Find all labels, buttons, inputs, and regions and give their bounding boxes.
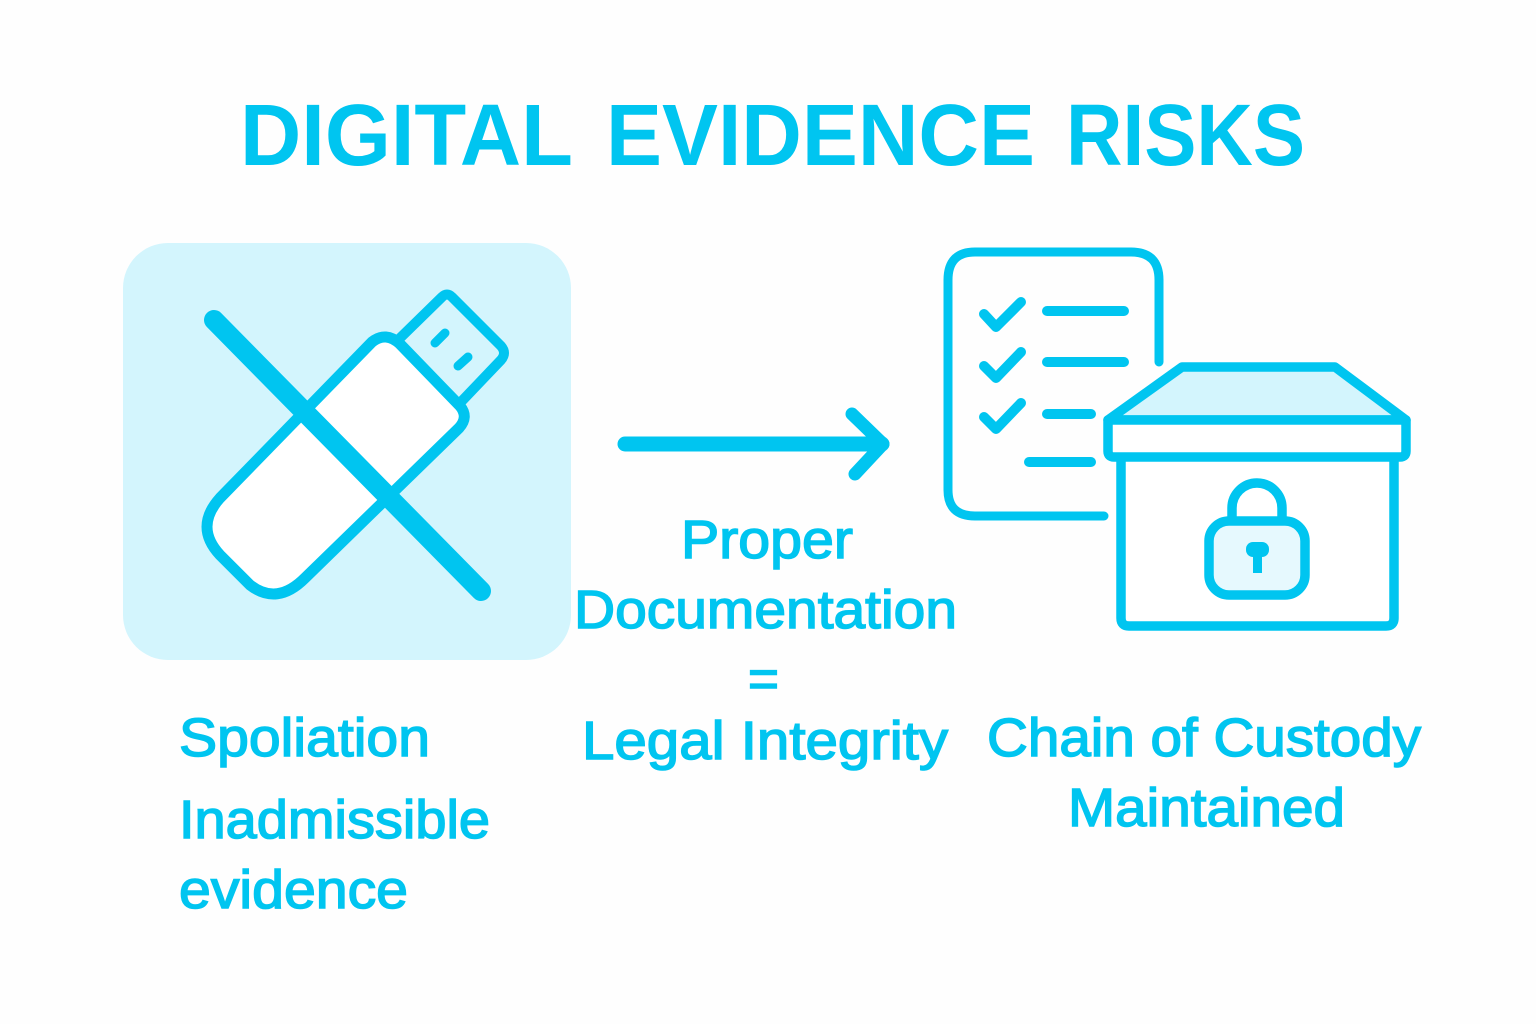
arrow xyxy=(625,414,883,474)
panel: spoliated USB drive xyxy=(123,243,571,660)
title xyxy=(240,87,1305,184)
padlock xyxy=(1209,483,1305,595)
title: DIGITAL xyxy=(240,87,573,184)
label: inadmissible evidence xyxy=(179,790,490,920)
label: inadmissible evidence: evidence xyxy=(179,860,408,920)
label: proper documentation equals legal integrity: Documentation xyxy=(574,580,957,640)
label: chain of custody maintained: Chain of Custody xyxy=(987,708,1421,768)
label: proper documentation equals legal integrity: Proper xyxy=(681,510,853,570)
icon: crossed-out USB drive xyxy=(207,294,504,594)
label: chain of custody maintained: Maintained xyxy=(1068,778,1345,838)
label: chain of custody maintained xyxy=(987,708,1421,838)
strike-through line xyxy=(214,320,481,591)
label: spoliation: Spoliation xyxy=(179,708,430,768)
label: proper documentation equals legal integrity: Legal Integrity xyxy=(582,711,948,771)
box lid band xyxy=(1108,420,1406,457)
box body xyxy=(1121,457,1394,626)
label: proper documentation equals legal integrity xyxy=(574,510,957,771)
label: inadmissible evidence: Inadmissible xyxy=(179,790,490,850)
USB connector xyxy=(397,294,504,403)
title: EVIDENCE xyxy=(606,87,1035,184)
USB contacts xyxy=(435,333,468,366)
USB body xyxy=(207,337,464,594)
icon: checklist document xyxy=(948,252,1159,516)
label: proper documentation equals legal integrity: = xyxy=(748,649,779,709)
box lid top xyxy=(1108,367,1406,420)
title: RISKS xyxy=(1066,87,1305,184)
icon: locked evidence box xyxy=(1108,367,1406,626)
